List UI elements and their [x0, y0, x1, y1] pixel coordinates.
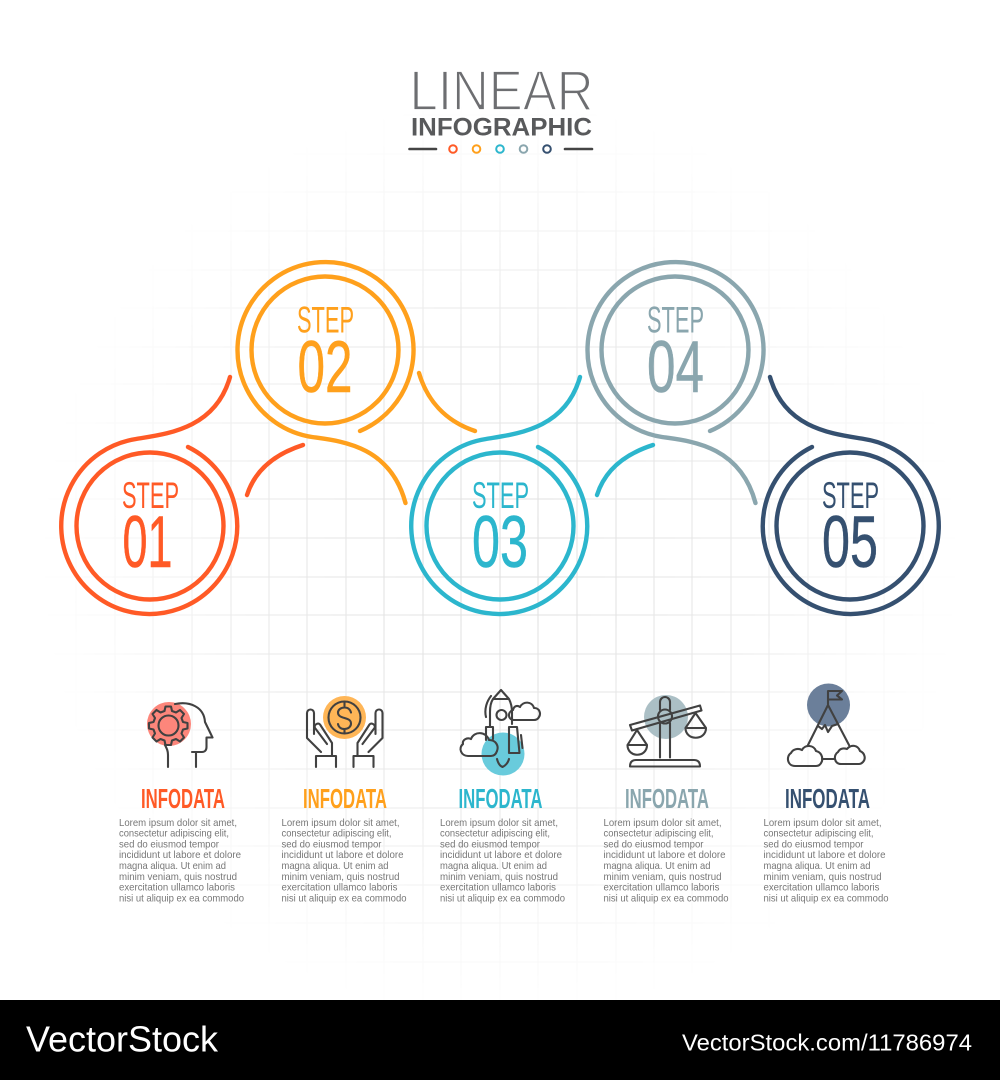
text block: infodata 5 — [764, 783, 889, 904]
heading: infodata 4: INFODATA — [625, 783, 709, 814]
number: 03: 03 — [472, 502, 528, 583]
body text: infodata 1: consectetur adipiscing elit, — [119, 828, 229, 840]
body text: infodata 4: consectetur adipiscing elit, — [604, 828, 714, 840]
body text: infodata 1: sed do eiusmod tempor — [119, 840, 219, 850]
body text: infodata 5: Lorem ipsum dolor sit amet, — [764, 818, 882, 829]
text block: infodata 3 — [440, 783, 565, 904]
connector tail: step 02 — [419, 373, 475, 431]
body text: infodata 2 — [282, 818, 407, 904]
body text: infodata 4: sed do eiusmod tempor — [604, 840, 704, 850]
body text: infodata 2: incididunt ut labore et dolore — [282, 850, 404, 861]
heading: infodata 5: INFODATA — [785, 783, 870, 814]
step 02 — [238, 262, 475, 503]
body text: infodata 5: sed do eiusmod tempor — [764, 840, 864, 850]
body text: infodata 2: nisi ut aliquip ex ea commodo — [282, 894, 407, 904]
number: 01: 01 — [122, 502, 172, 583]
outer ring and connector: step 05 — [763, 377, 939, 614]
outer ring and connector: step 04 — [588, 262, 764, 503]
icon: balance scale — [628, 695, 706, 766]
label: STEP 04: STEP — [647, 300, 704, 340]
body text: infodata 4 — [604, 818, 729, 904]
footer url text: VectorStock.com/11786974 — [682, 1030, 972, 1056]
body text: infodata 5: consectetur adipiscing elit, — [764, 828, 874, 840]
text block: infodata 4 — [604, 783, 729, 904]
body text: infodata 2: consectetur adipiscing elit, — [282, 828, 392, 840]
label: STEP 05: STEP — [822, 475, 879, 516]
text block: infodata 1 — [119, 783, 244, 904]
inner ring: step 04 — [602, 276, 748, 424]
body text: infodata 5 — [764, 818, 889, 904]
body text: infodata 5: magna aliqua. Ut enim ad — [764, 861, 871, 872]
body text: infodata 3: incididunt ut labore et dolore — [440, 850, 562, 861]
body text: infodata 3: consectetur adipiscing elit, — [440, 828, 550, 840]
number: 04: 04 — [647, 327, 704, 408]
body text: infodata 3: exercitation ullamco laboris — [440, 882, 556, 894]
heading: INFOGRAPHIC: INFOGRAPHIC — [411, 114, 592, 142]
inner ring: step 03 — [426, 452, 574, 600]
heading: infodata 3: INFODATA — [458, 783, 542, 814]
number: 02: 02 — [298, 327, 352, 408]
body text: infodata 2: sed do eiusmod tempor — [282, 840, 382, 850]
number: 05: 05 — [822, 502, 878, 583]
body text: infodata 3: minim veniam, quis nostrud — [440, 872, 558, 883]
body text: infodata 5: exercitation ullamco laboris — [764, 882, 880, 894]
body text: infodata 3: Lorem ipsum dolor sit amet, — [440, 818, 558, 829]
icon: head with gear — [147, 702, 212, 767]
body text: infodata 4: magna aliqua. Ut enim ad — [604, 861, 711, 872]
icon: mountain with flag — [788, 684, 865, 766]
body text: infodata 5: incididunt ut labore et dolore — [764, 850, 886, 861]
body text: infodata 4: nisi ut aliquip ex ea commodo — [604, 894, 729, 904]
footer bar — [0, 1000, 1000, 1080]
outer ring and connector: step 03 — [411, 377, 587, 614]
icon: rocket with clouds — [461, 690, 540, 776]
body text: infodata 2: Lorem ipsum dolor sit amet, — [282, 818, 400, 829]
body text: infodata 1: minim veniam, quis nostrud — [119, 872, 237, 883]
body text: infodata 1: nisi ut aliquip ex ea commodo — [119, 894, 244, 904]
label: STEP 03: STEP — [472, 475, 529, 516]
label: STEP 02: STEP — [297, 300, 354, 340]
inner ring: step 05 — [776, 452, 924, 600]
body text: infodata 1: magna aliqua. Ut enim ad — [119, 861, 226, 872]
footer logo text: VectorStock — [26, 1018, 219, 1060]
icon: hands with coin — [307, 696, 383, 767]
step 04 — [588, 262, 764, 503]
title — [410, 59, 594, 153]
heading: LINEAR: LINEAR — [410, 59, 594, 123]
body text: infodata 5: minim veniam, quis nostrud — [764, 872, 882, 883]
body text: infodata 1: exercitation ullamco laboris — [119, 882, 235, 894]
inner ring: step 02 — [252, 276, 398, 424]
body text: infodata 4: exercitation ullamco laboris — [604, 882, 720, 894]
title divider with dots — [410, 145, 592, 153]
step 05 — [763, 377, 939, 614]
label: STEP 01: STEP — [122, 475, 179, 516]
body text: infodata 3: magna aliqua. Ut enim ad — [440, 861, 547, 872]
body text: infodata 1: incididunt ut labore et dolore — [119, 850, 241, 861]
body text: infodata 2: magna aliqua. Ut enim ad — [282, 861, 389, 872]
connector tail: step 01 — [247, 445, 303, 495]
connector tail: step 03 — [597, 445, 653, 495]
text block: infodata 2 — [282, 783, 407, 904]
body text: infodata 1 — [119, 818, 244, 904]
body text: infodata 3: sed do eiusmod tempor — [440, 840, 540, 850]
heading: infodata 2: INFODATA — [303, 783, 387, 814]
body text: infodata 4: minim veniam, quis nostrud — [604, 872, 722, 883]
body text: infodata 4: Lorem ipsum dolor sit amet, — [604, 818, 722, 829]
inner ring: step 01 — [76, 452, 224, 600]
body text: infodata 2: exercitation ullamco laboris — [282, 882, 398, 894]
step 01 — [61, 377, 303, 614]
heading: infodata 1: INFODATA — [141, 783, 225, 814]
outer ring and connector: step 02 — [238, 262, 414, 503]
body text: infodata 1: Lorem ipsum dolor sit amet, — [119, 818, 237, 829]
body text: infodata 2: minim veniam, quis nostrud — [282, 872, 400, 883]
step 03 — [411, 377, 653, 614]
body text: infodata 5: nisi ut aliquip ex ea commodo — [764, 894, 889, 904]
body text: infodata 3: nisi ut aliquip ex ea commodo — [440, 894, 565, 904]
body text: infodata 4: incididunt ut labore et dolore — [604, 850, 726, 861]
body text: infodata 3 — [440, 818, 565, 904]
outer ring and connector: step 01 — [61, 377, 237, 614]
